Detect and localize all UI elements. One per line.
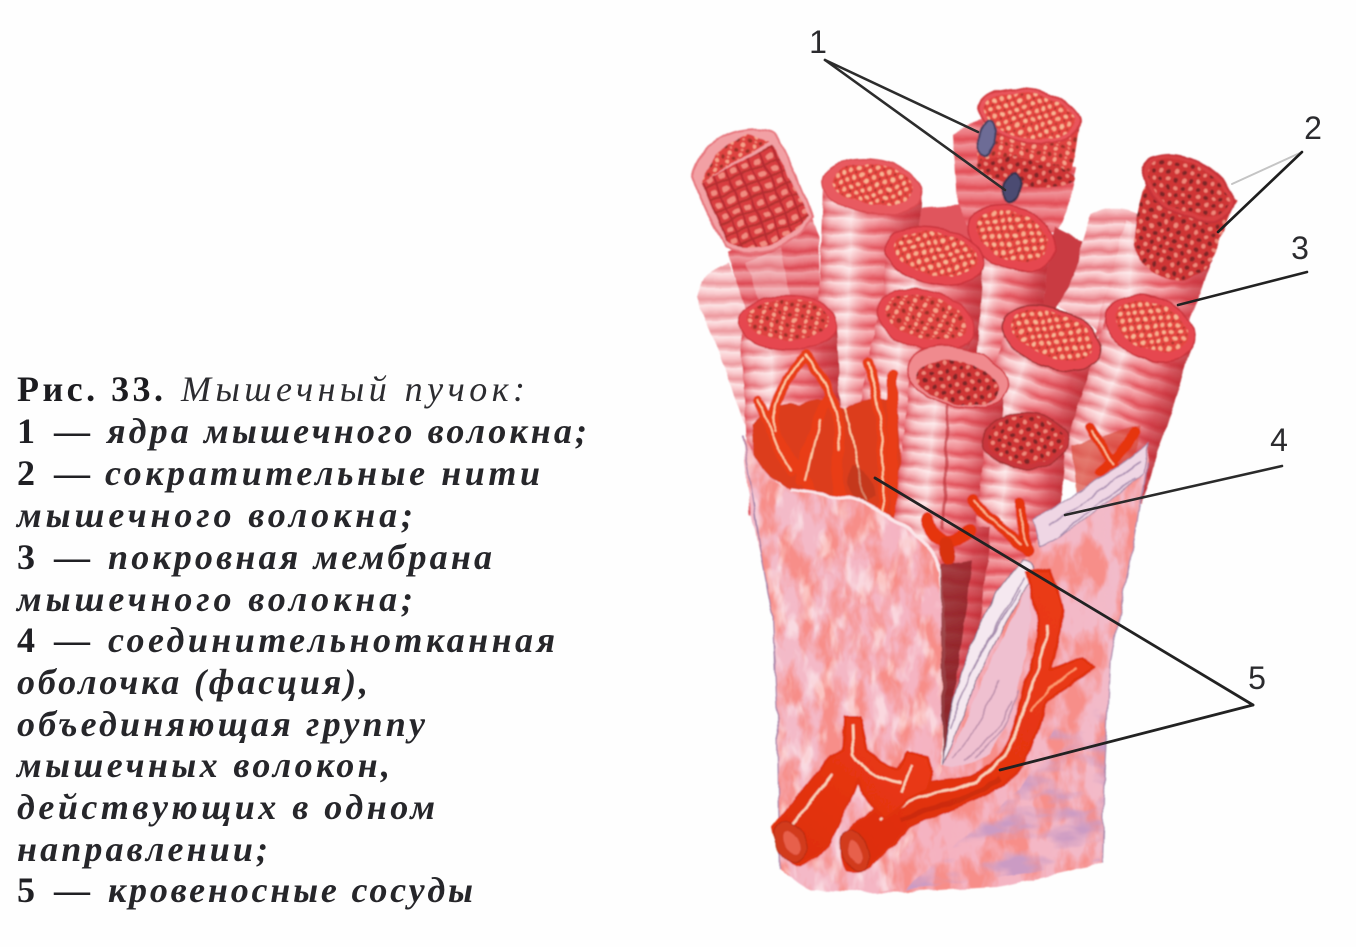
item 5: кровеносные сосуды — [108, 870, 473, 910]
item 4: действующих в одном — [17, 787, 435, 827]
fascia sheath — [743, 436, 1148, 892]
leader lines: label 1 — [825, 60, 1005, 190]
caption heading: Мышечный пучок: — [180, 369, 525, 409]
fiber: back middle stub — [915, 205, 1000, 300]
vessel: second artery — [767, 717, 931, 868]
item 3 — [15, 537, 492, 619]
muscle bundle illustration — [692, 82, 1244, 892]
nucleus: lower — [1001, 171, 1023, 205]
fiber: centre left upper — [878, 218, 990, 369]
leader lines: label 5 — [875, 478, 1253, 770]
item 1: ядра мышечного волокна; — [105, 411, 587, 451]
vessel branches: upper fork — [927, 500, 1030, 558]
caption text block — [15, 369, 587, 910]
item 4 — [15, 620, 555, 869]
leader line: label 3 — [1178, 272, 1307, 305]
item 2: 2 — — [17, 453, 91, 493]
fiber: front short — [976, 413, 1069, 535]
item 4: 4 — — [17, 620, 91, 660]
fiber: back right — [1058, 210, 1140, 335]
item 3: мышечного волокна; — [15, 579, 413, 619]
slit shadow showing muscle behind — [940, 560, 972, 765]
fiber: second from left — [814, 153, 925, 449]
fiber: behind slit — [960, 470, 1045, 630]
fiber: back centre with nuclei — [953, 82, 1084, 240]
caption heading: Рис. 33. — [17, 369, 163, 409]
item 3: покровная мембрана — [108, 537, 492, 577]
item 2: сократительные нити — [105, 453, 540, 493]
item 4: оболочка (фасция), — [17, 662, 368, 702]
fiber: far right lower — [1054, 282, 1204, 504]
item 4: направлении; — [17, 829, 268, 869]
leader lines: label 2 — [1218, 152, 1302, 232]
leader line: label 4 — [1065, 466, 1282, 515]
item 2: мышечного волокна; — [15, 495, 413, 535]
label 3: 3 — [1291, 230, 1309, 266]
item 2 — [15, 453, 540, 535]
label 1: 1 — [809, 24, 827, 60]
item 1: 1 — — [17, 411, 91, 451]
label 4: 4 — [1270, 422, 1288, 458]
vessel: main artery — [835, 570, 1093, 875]
item 3: 3 — — [17, 537, 91, 577]
fiber: front centre left — [832, 279, 981, 565]
fiber: front centre, open end — [872, 337, 1015, 750]
label 5: 5 — [1248, 660, 1266, 696]
item 4: соединительнотканная — [108, 620, 555, 660]
fiber: centre right lower — [965, 293, 1111, 485]
item 4: объединяющая группу — [17, 704, 426, 744]
fiber: dark back right — [1038, 227, 1082, 320]
item 5: 5 — — [17, 870, 91, 910]
fascia flap: inner fold — [943, 560, 1034, 767]
caption heading — [17, 369, 525, 409]
fiber: top left with grid end — [692, 129, 820, 345]
fiber: pale back left — [696, 262, 790, 470]
item 4: мышечных волокон, — [15, 745, 390, 785]
fiber: right top with contractile filaments — [1095, 141, 1244, 345]
leader lines group — [825, 60, 1307, 770]
fascia flap: upper right fold — [1033, 443, 1148, 547]
blood vessel network over fibers — [752, 355, 1140, 530]
label 2: 2 — [1304, 110, 1322, 146]
fiber: front left — [739, 296, 846, 515]
nucleus: upper — [976, 119, 998, 157]
fiber: centre upper — [954, 193, 1066, 372]
